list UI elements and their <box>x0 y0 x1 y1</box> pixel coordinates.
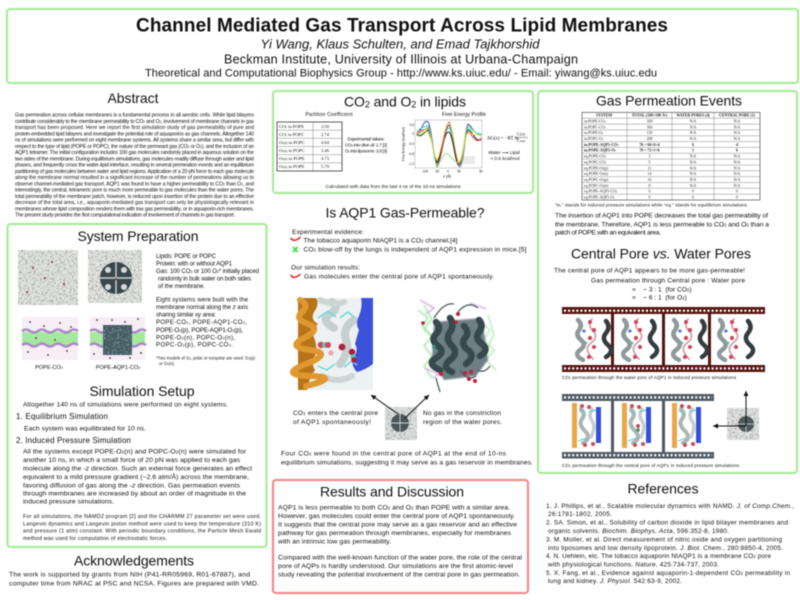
table: gas permeation events: N/A <box>734 178 741 182</box>
table: gas permeation events: 208 <box>647 137 652 141</box>
figure: AQP1 monomer with no gas in constriction region <box>418 300 496 392</box>
acknowledgements text: computer time from NRAC at PSC and NCSA. Figures are prepared with VMD. <box>9 580 259 588</box>
arrow: to central pore figure <box>371 395 398 414</box>
experimental evidence list: The tobacco aquaporin NtAQP1 is a CO2 channel.[4] <box>304 237 458 244</box>
figure: POPE-CO2 top view <box>18 250 78 305</box>
table: gas permeation events: eq.POPC-O2(p) <box>584 178 609 182</box>
table: gas permeation events: N/A <box>734 172 741 176</box>
table: gas permeation events: TOTAL (100×100 Å²) <box>632 113 668 118</box>
abstract text: AQP1 tetramer. The initial configuration includes 100 gas molecules randomly placed in aqueous solution on the <box>15 150 254 156</box>
label: POPE-CO2: POPE-CO2 <box>35 365 63 371</box>
table: partition coefficients: CO2 in POPC <box>279 132 304 137</box>
abstract text: The present study provides the first computational indication of involvement of channels in gas transport. <box>15 212 235 218</box>
section: is AQP1 gas-permeable <box>281 204 533 466</box>
acknowledgements text <box>9 572 259 588</box>
chart: free energy profile: -0.8 <box>408 152 414 156</box>
permeation ratios <box>591 277 745 301</box>
abstract text: protein-embedded lipid bilayers and investigate the potential role of aquaporins as gas channels. Altogether 140 <box>15 131 254 137</box>
experimental evidence list: Gas molecules enter the central pore of AQP1 spontaneously. <box>304 273 494 280</box>
table: gas permeation events: 3 <box>649 155 651 159</box>
system description text: *Two models of O2, polar or nonpolar are used: O2(p) <box>156 356 256 361</box>
system description text: POPE-O2(n), POPC-O2(n), <box>156 334 235 341</box>
experimental evidence list: Experimental evidence: <box>292 229 364 236</box>
equation: free energy: C(z) <box>517 132 526 136</box>
system description text: Eight systems were built with the <box>156 296 249 304</box>
table: partition coefficients: 3.46 <box>321 148 330 153</box>
heading: system preparation: System Preparation <box>78 228 198 244</box>
table: gas permeation events: SYSTEM <box>596 114 612 118</box>
step 2 text: All the systems except POPE-O2(n) and POPC-O2(n) were simulated for <box>23 449 247 456</box>
panel: abstract <box>15 90 254 218</box>
reference list: 3. M. Moller, et al. Direct measurement of nitric oxide and oxygen partitioning <box>546 536 782 544</box>
callout: CO2 enters the central pore <box>293 410 378 426</box>
callout: no gas in constriction region: region of the water pores. <box>423 419 502 426</box>
table: gas permeation events: N/A <box>690 131 697 135</box>
experimental evidence list <box>291 229 527 280</box>
abstract text: respect to the type of lipid (POPE or POPC), the nature of the permeant gas (CO2 or O2), and the inclusion of an <box>15 144 254 150</box>
panel: gas permeation events and central pore <box>538 91 797 473</box>
chart: free energy profile: Free Energy (kcal/mol) <box>402 127 406 161</box>
methods note <box>23 514 261 542</box>
abstract text: two sides of the membrane. During equilibrium simulations, gas molecules readily diffuse through water and lipid <box>15 156 254 162</box>
figure: POPE-CO2 side view <box>22 317 78 360</box>
chart: free energy profile: 0.4 <box>410 123 414 127</box>
table: gas permeation events: 0 <box>692 195 694 199</box>
equation: free energy <box>487 132 528 143</box>
table: gas permeation events: 0 <box>692 190 694 194</box>
table: gas permeation events: eq.POPC-O2(n) <box>584 184 609 188</box>
step 2 text: favoring diffusion of gas along the -z direction. Gas permeation events <box>23 482 241 489</box>
table: gas permeation events: N/A <box>734 155 741 159</box>
permeation ratios: = ~ 6 : 1 (for O2) <box>632 294 687 301</box>
table: gas permeation events: N/A <box>690 166 697 170</box>
permeation finding text: The insertion of AQP1 into POPE decreases the total gas permeability of <box>555 212 768 219</box>
table: partition coefficients: CO2 in POPE <box>279 124 304 129</box>
simulation overview: Altogether 140 ns of simulations were performed on eight systems. <box>23 401 228 408</box>
chart: free energy profile: z (Å) <box>442 174 452 178</box>
permeation ratios: Gas permeation through Central pore : Water pore <box>591 277 745 284</box>
table: partition coefficients: 4.73 <box>321 156 330 161</box>
table footnote: "in." stands for induced pressure simulations while "eq." stands for equilibrium simulations. <box>555 202 748 208</box>
callout: CO2 enters the central pore: of AQP1 spontaneously! <box>293 419 371 426</box>
heading: results and discussion: Results and Discussion <box>320 484 464 500</box>
caption: central pore: CO2 permeation through the central pore of AQP1 in induced pressure simulations <box>562 463 740 468</box>
results text: AQP1 is less permeable to both CO2 and O2 than POPE with a similar area. <box>278 505 510 512</box>
system description text <box>156 253 259 366</box>
table: gas permeation events: in.POPE-CO2 <box>584 120 606 124</box>
reference list: 5. X. Fang, et al., Evidence against aquaporin-1-dependent CO2 permeability in <box>546 570 790 577</box>
table: gas permeation events: N/A <box>690 160 697 164</box>
table: gas permeation events: N/A <box>734 137 741 141</box>
experimental values: O2 into liposome: 3.9 [3] <box>345 149 387 154</box>
system description text: randomly in bulk water on both sides <box>158 276 251 283</box>
abstract text: decrease of the total area, i.e., aquaporin-mediated gas transport can only be physiologically relevant in <box>15 200 254 206</box>
table: gas permeation events: eq.POPC-CO2 <box>584 160 607 165</box>
figure: tetramer thumbnail with view arrows <box>713 391 759 440</box>
panel: CO2 and O2 in lipids <box>273 91 533 193</box>
caption: water pore: CO2 permeation through the water pore of AQP1 in induced pressure simulations <box>562 375 737 380</box>
reference list: 1. J. Phillips, et al., Scalable molecular dynamics with NAMD. J. of Comp.Chem., <box>546 503 794 510</box>
heading: gas permeation events: Gas Permeation Events <box>596 92 742 108</box>
table: gas permeation events: 11 <box>648 184 651 188</box>
results text: However, gas molecules could enter the central pore of AQP1 spontaneously. <box>278 513 515 520</box>
table: gas permeation events: CENTRAL PORE (1) <box>719 114 756 118</box>
abstract text: ns of simulations were performed on eight membrane systems. All systems share a similar area, but differ with <box>15 138 254 144</box>
table: gas permeation events: N/A <box>690 178 697 182</box>
callout: no gas in constriction region: No gas in the constriction <box>423 410 501 417</box>
heading: central pore vs water pores: Central Pore vs. Water Pores <box>571 246 751 262</box>
chart: free energy profile: -1.2 <box>408 162 414 166</box>
system description text: POPE-O2(p), POPE-AQP1-O2(p), <box>156 327 243 334</box>
film strip: water pore frames <box>562 307 765 372</box>
section: references <box>546 480 794 585</box>
system description text: Gas: 100 CO2 or 100 O2* initially placed <box>156 268 259 275</box>
reference list: 4. N. Uehlein, etc. The tobacco aquaporin NtAQP1 is a membrane CO2 pore <box>546 553 771 560</box>
step 2 text <box>23 449 252 506</box>
results text: study revealing the potential involvement of the central pore in gas permeation. <box>278 572 520 579</box>
experimental values: CO2 into olive oil: 1.7 [2] <box>345 143 387 148</box>
system description text: of the membrane. <box>158 283 205 290</box>
table: gas permeation events: 1 <box>692 149 694 153</box>
title: Channel Mediated Gas Transport Across Lipid Membranes <box>136 16 668 36</box>
table: partition coefficients: 2.74 <box>321 132 330 137</box>
chart: free energy profile: -100 <box>422 170 428 174</box>
table: gas permeation events: 0 <box>736 190 738 194</box>
permeation finding text <box>555 212 769 236</box>
abstract text: total permeability of the membrane patch, however, is reduced upon insertion of the protein due to an effective <box>15 194 254 200</box>
table: gas permeation events: N/A <box>690 125 697 129</box>
abstract text: contribute considerably to the membrane permeability to CO2 and O2, involvement of membrane channels in gas <box>15 119 254 125</box>
table: gas permeation events: 0 <box>649 195 651 199</box>
experimental values <box>345 137 387 154</box>
table: partition coefficients: O2(n) in POPC <box>279 148 305 153</box>
permeation finding text: patch of POPE with an equivalent area. <box>555 229 661 236</box>
step 1 text: Each system was equilibrated for 10 ns. <box>24 425 146 432</box>
label: partition coefficient: Partition Coefficient <box>306 112 353 118</box>
system description text: or O2(n). <box>159 361 175 366</box>
note: water to lipid free energy: < 0.6 kcal/mol <box>490 156 520 161</box>
icon: red check <box>291 238 300 240</box>
step 2 text: molecule along the -z direction. Such an external force generates an effect <box>23 466 252 473</box>
label: free energy profile: Free Energy Profile <box>442 112 486 118</box>
table: partition coefficients: 3.50 <box>321 124 330 129</box>
finding text: Four CO2 were found in the central pore of AQP1 at the end of 10-ns <box>281 450 507 457</box>
table: gas permeation events: N/A <box>734 166 741 170</box>
contact line: Theoretical and Computational Biophysics Group - http://www.ks.uiuc.edu/ - Email: yiwang@ks.uiuc.edu <box>145 68 657 80</box>
reference list: 26:1781-1802, 2005. <box>548 511 612 518</box>
label: POPE-AQP1-CO2: POPE-AQP1-CO2 <box>96 365 140 371</box>
heading: is AQP1 gas-permeable: Is AQP1 Gas-Permeable? <box>326 204 485 220</box>
methods note: For all simulations, the NAMD2 program [2] and the CHARMM 27 parameter set were used. <box>23 514 261 520</box>
central pore statement: The central pore of AQP1 appears to be more gas-permeable! <box>554 267 745 274</box>
table: gas permeation events: N/A <box>690 172 697 176</box>
table: partition coefficients: 5.79 <box>321 164 330 169</box>
equation: free energy: Cbulk <box>517 138 526 143</box>
icon: red check <box>291 274 300 277</box>
methods note: and pressure (1 atm) constant. With periodic boundary conditions, the Particle Mesh Ewald <box>23 529 261 535</box>
permeation ratios: = ~ 3 : 1 (for CO2) <box>632 286 692 293</box>
table: gas permeation events <box>582 112 760 200</box>
table: gas permeation events: N/A <box>734 120 741 124</box>
system description text: POPC-O2(p), POPC-CO2. <box>156 342 233 349</box>
table: gas permeation events: N/A <box>690 137 697 141</box>
equation: free energy: ΔG(z) = −RT ln <box>487 136 519 142</box>
step 2 text: equivalent to a mild pressure gradient (~2.6 atm/Å) across the membrane, <box>23 472 249 481</box>
table: gas permeation events: in.POPE-O2 <box>584 131 604 136</box>
table: gas permeation events: 14 <box>648 172 652 176</box>
table: gas permeation events: N/A <box>690 120 697 124</box>
table: gas permeation events: eq.POPE-CO2 <box>584 155 607 159</box>
figure: CO2 in central pore <box>293 298 373 390</box>
chart: free energy profile: -50 <box>435 170 440 174</box>
methods note: method was used for computation of electrostatic forces. <box>23 536 167 542</box>
reference list: 2. SA. Simon, et al., Solubility of carbon dioxide in lipid bilayer membranes and <box>546 520 788 526</box>
chart: free energy profile: -0.4 <box>408 142 414 146</box>
system description text: Protein: with or without AQP1 <box>156 261 233 268</box>
table: gas permeation events: 79 = 72+1+6 <box>639 149 660 153</box>
affiliation: Beckman Institute, University of Illinois at Urbana-Champaign <box>224 52 578 66</box>
experimental values: Experimental Values: <box>348 137 384 142</box>
chart: free energy profile: 50 <box>479 170 483 174</box>
abstract text: transport has been proposed. Here we report the first simulation study of gas permeability of pure and <box>15 125 254 131</box>
table: gas permeation events: N/A <box>734 131 741 135</box>
heading: simulation setup: Simulation Setup <box>90 383 195 399</box>
table: partition coefficients: 4.04 <box>321 140 330 145</box>
results text: pathway for gas permeation through membranes, especially for membranes <box>278 530 512 537</box>
table: gas permeation events: N/A <box>690 155 697 159</box>
heading: abstract: Abstract <box>108 90 159 106</box>
table: gas permeation events: 160 <box>647 125 652 129</box>
abstract text: observe channel-mediated gas transport. AQP1 was found to have a higher permeability to CO2 than O2, and <box>15 181 254 187</box>
table: gas permeation events: 5 <box>649 160 651 164</box>
abstract text: along the membrane normal resulted in a significant increase of the number of permeations allowing us to <box>15 175 254 181</box>
table: gas permeation events: 76 = 66+6+4 <box>639 143 660 147</box>
table: gas permeation events: eq.POPE-O2(n) <box>584 172 609 176</box>
chart: free energy profile: 0 <box>447 170 449 174</box>
step 2 text: induced pressure simulations. <box>23 499 114 506</box>
heading: acknowledgements: Acknowledgements <box>74 552 194 568</box>
step 2 text: through membranes are increased by about an order of magnitude in the <box>23 490 246 497</box>
film strip: central pore frames <box>562 394 714 458</box>
icon: green cross <box>293 247 298 252</box>
note: water to lipid free energy: Water ⟶ Lipid <box>488 150 520 155</box>
reference list: organic solvents. Biochim. Biophys. Acta, 596:352-8, 1980. <box>548 528 729 535</box>
note: water to lipid free energy <box>488 150 520 161</box>
results text: with an intrinsic low gas permeability. <box>277 538 391 545</box>
chart: free energy profile: 50 <box>457 170 461 174</box>
abstract text: phases, and frequently cross the water-lipid interface, resulting in several permeation events and an equilibrium <box>15 162 254 168</box>
table: gas permeation events: N/A <box>734 125 741 129</box>
table: gas permeation events: in.POPC-CO2 <box>584 125 606 130</box>
panel: system preparation and simulation setup <box>8 224 266 547</box>
methods note: Langevin dynamics and Langevin piston method were used to keep the temperature (310 K) <box>23 521 261 527</box>
table: gas permeation events: 16 <box>648 178 652 182</box>
abstract text: partitioning of gas molecules between water and lipid regions. Application of a 20 pN force to each gas molecule <box>15 169 254 175</box>
table: gas permeation events: WATER PORES (4) <box>676 114 710 118</box>
table: gas permeation events: N/A <box>690 184 697 188</box>
chart: free energy profile: 0 <box>412 132 414 136</box>
step 2 heading: 2. Induced Pressure Simulation <box>16 436 131 445</box>
panel: results and discussion <box>273 480 528 593</box>
results text: It suggests that the central pore may serve as a gas reservoir and an effective <box>278 522 517 529</box>
figure: POPE-AQP1-CO2 top view <box>88 250 142 303</box>
table: gas permeation events: eq.POPE-O2(p) <box>584 166 609 171</box>
abstract text: Gas permeation across cellular membranes is a fundamental process in all aerobic cells. While lipid bilayers <box>15 112 254 118</box>
figure: AQP1 tetramer thumbnail <box>385 407 417 440</box>
system description text: Lipids: POPE or POPC <box>156 253 217 260</box>
table: partition coefficients: O2(P) in POPC <box>279 140 305 145</box>
table: gas permeation events: 4 <box>736 143 738 147</box>
results text: Compared with the well-known function of the water pore, the role of the central <box>278 555 522 562</box>
table: gas permeation events: 11 <box>648 166 651 170</box>
step 2 text: another 10 ns, in which a small force of 20 pN was applied to each gas <box>23 457 241 464</box>
abstract text: membranes whose lipid composition renders them with low gas permeability, or in aquaporin-rich membranes. <box>15 206 254 212</box>
table: gas permeation events: 110 <box>647 131 652 135</box>
system description text: membrane normal along the z axis <box>156 304 248 311</box>
table: gas permeation events: eq.POPE-AQP1-CO2 <box>584 190 618 194</box>
chart: free energy profile <box>402 120 483 178</box>
table: partition coefficients <box>277 122 342 171</box>
heading: references: References <box>628 480 698 496</box>
step 1 heading: 1. Equilibrium Simulation <box>16 412 108 421</box>
table: gas permeation events: in.POPC-O2 <box>584 137 604 141</box>
table: gas permeation events: in.POPE-AQP1-O2 <box>584 149 616 153</box>
caption: CO2 panel: Calculated with data from the last 4 ns of the 10-ns simulations <box>326 184 461 190</box>
results text <box>277 505 522 579</box>
arrow: to water pore figure <box>405 395 429 418</box>
figure: POPE-AQP1-CO2 side view <box>90 317 146 360</box>
table: gas permeation events: N/A <box>734 184 741 188</box>
experimental evidence list: Our simulation results: <box>291 264 360 271</box>
reference list: with physiological functions. Nature, 425:734-737, 2003. <box>547 562 719 568</box>
table: gas permeation events: in.POPE-AQP1-CO2 <box>584 143 619 147</box>
table: gas permeation events: 168 <box>647 120 652 124</box>
acknowledgements text: The work is supported by grants from NIH (P41-RR05969, R01-67887), and <box>9 572 250 578</box>
table: gas permeation events: 0 <box>649 190 651 194</box>
experimental evidence list: CO2 blow-off by the lungs is independent of AQP1 expression in mice.[5] <box>304 246 527 254</box>
heading: CO2 and O2 in lipids: CO2 and O2 in lipids <box>344 94 466 110</box>
authors: Yi Wang, Klaus Schulten, and Emad Tajkhorshid <box>260 36 540 52</box>
table: gas permeation events: N/A <box>734 160 741 164</box>
table: partition coefficients: O2(n) in POPE <box>279 164 305 169</box>
permeation finding text: the membrane. Therefore, AQP1 is less permeable to CO2 and O2 than a <box>555 221 769 228</box>
reference list <box>546 503 794 585</box>
results text: pore of AQPs is hardly understood. Our simulations are the first atomic-level <box>278 563 513 570</box>
finding text: equilibrium simulations, suggesting it may serve as a gas reservoir in membranes. <box>281 459 533 466</box>
reference list: lung and kidney. J. Physiol. 542:63-9, 2002. <box>548 578 682 585</box>
callout: CO2 enters the central pore: CO2 enters the central pore <box>293 410 378 417</box>
callout: no gas in constriction region <box>423 410 502 426</box>
panel: title header <box>7 9 798 83</box>
system description text: POPE-CO2, POPE-AQP1-CO2, <box>156 319 247 326</box>
table: gas permeation events: 6 <box>692 143 694 147</box>
table: partition coefficients: O2(P) in POPE <box>279 156 305 161</box>
system description text: sharing similar xy area: <box>156 312 216 319</box>
finding text <box>281 450 533 466</box>
reference list: into liposomes and low density lipoprotein. J. Biol. Chem., 280:8850-4, 2005. <box>548 545 783 552</box>
table: gas permeation events: eq.POPE-AQP1-O2 <box>584 195 615 200</box>
table: gas permeation events: 6 <box>736 149 738 153</box>
abstract text: interestingly, the central, tetrameric pore is much more permeable to gas molecules than the water pores. The <box>15 188 254 194</box>
table: gas permeation events: 0 <box>736 195 738 199</box>
abstract text <box>15 112 254 218</box>
